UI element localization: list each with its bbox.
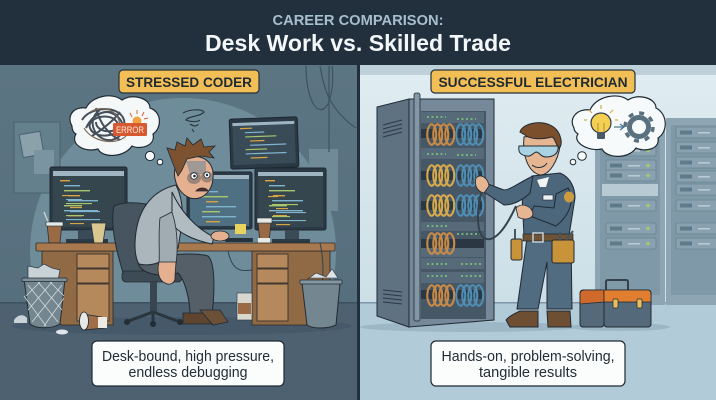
thought cloud: error xyxy=(70,96,163,165)
label: successful electrician: SUCCESSFUL ELECTRICIAN xyxy=(438,75,628,90)
character: electrician xyxy=(475,123,575,327)
caption: desk work: Desk-bound, high pressure, xyxy=(102,349,274,365)
icon: stress swirl xyxy=(183,110,204,132)
cable bundles xyxy=(421,124,484,306)
server rack xyxy=(377,93,494,327)
caption: desk work: endless debugging xyxy=(128,365,248,381)
indicator rows xyxy=(421,112,484,283)
icon: gear xyxy=(625,113,653,141)
thought cloud: idea to gear xyxy=(570,96,665,165)
tipped coffee cup xyxy=(56,312,107,334)
title: Desk Work vs. Skilled Trade xyxy=(205,30,511,56)
background server racks xyxy=(595,118,716,305)
monitor: top xyxy=(229,117,299,170)
icon: light bulb xyxy=(584,105,618,139)
header band xyxy=(0,0,716,65)
caption: skilled trade xyxy=(431,341,625,386)
label: stressed coder xyxy=(119,70,259,93)
chair xyxy=(113,203,183,327)
wall notes xyxy=(14,66,356,211)
panel: successful electrician xyxy=(357,65,716,400)
label: successful electrician xyxy=(431,70,635,93)
trash can: wire basket xyxy=(14,264,67,328)
safety goggles xyxy=(519,146,558,157)
caption: desk work xyxy=(92,341,284,386)
tool pouches xyxy=(511,229,574,263)
panel: stressed coder xyxy=(0,65,357,400)
coffee cups on desk xyxy=(44,212,272,243)
icon: arrow xyxy=(614,124,624,130)
monitor: right xyxy=(255,168,326,243)
character: stressed coder xyxy=(135,138,229,325)
monitor: middle xyxy=(187,172,252,229)
trash can: metal bin xyxy=(300,269,342,328)
label: stressed coder: STRESSED CODER xyxy=(126,75,252,90)
desk xyxy=(36,238,335,325)
toolbox xyxy=(580,280,651,327)
title: CAREER COMPARISON: xyxy=(272,13,444,29)
caption: skilled trade: tangible results xyxy=(479,365,577,381)
error tag: ERROR xyxy=(116,125,144,135)
title xyxy=(205,13,511,56)
caption: skilled trade: Hands-on, problem-solving, xyxy=(442,349,614,365)
monitor: left xyxy=(50,167,127,243)
